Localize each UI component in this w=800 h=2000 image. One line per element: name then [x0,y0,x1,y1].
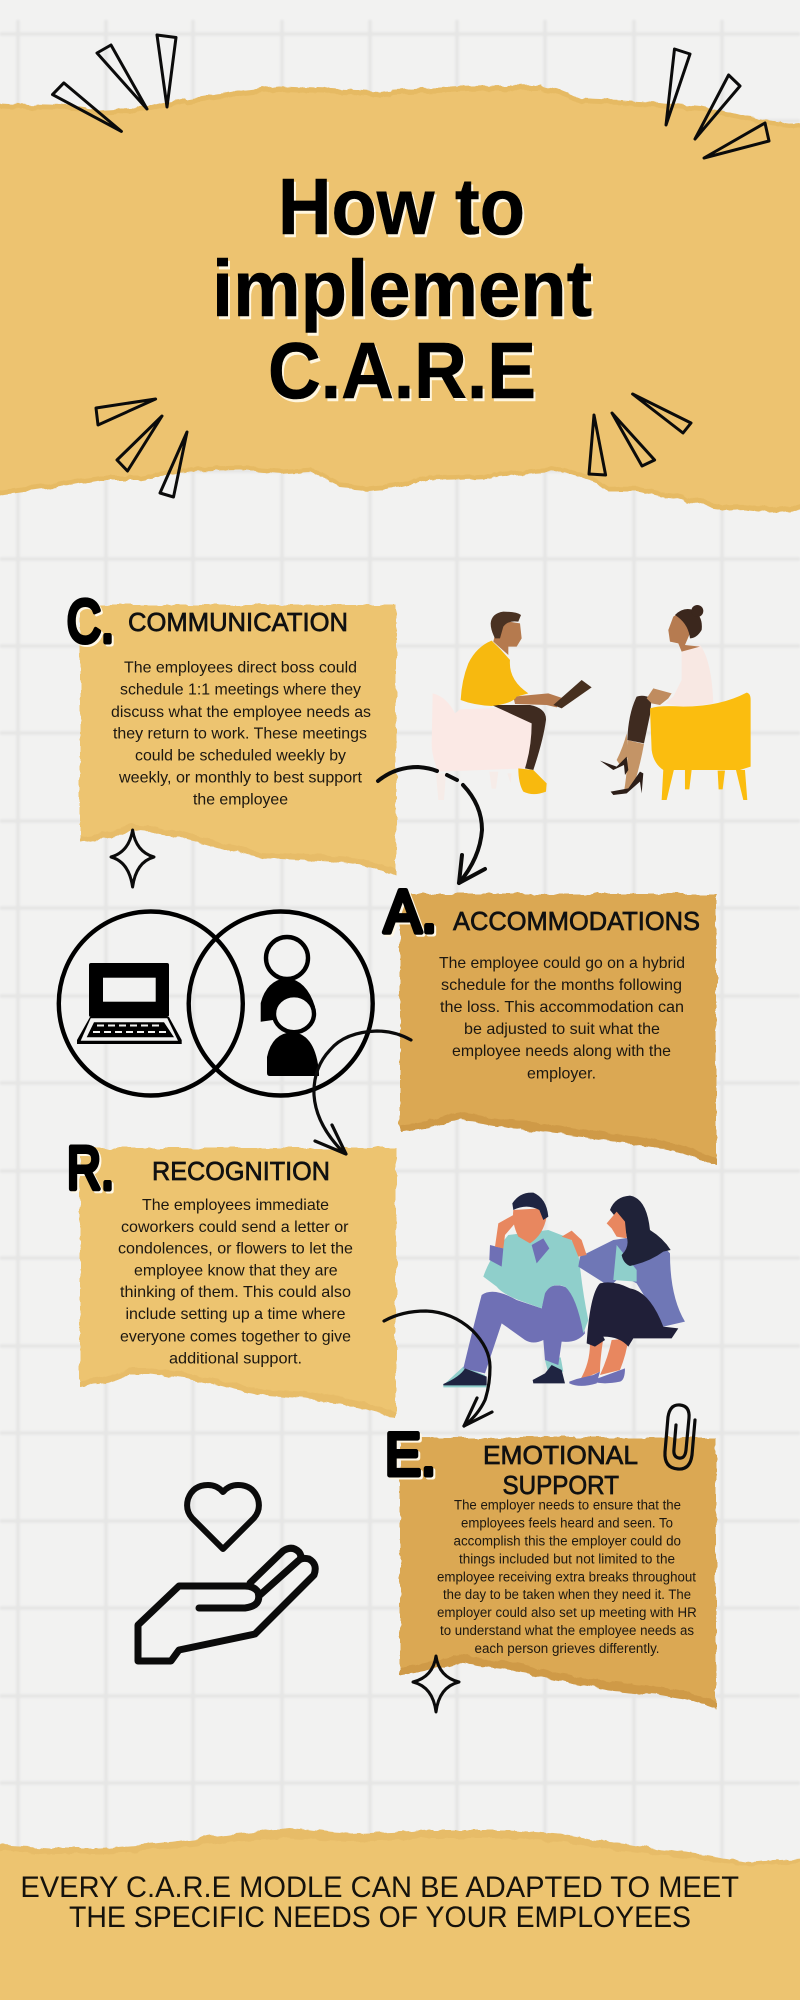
body text: emotional support: employees feels heard and seen. To [461,1515,673,1530]
body text: communication: the employee [193,792,288,809]
body text: emotional support: each person grieves differently. [474,1641,660,1656]
body text: accommodations: be adjusted to suit what the [464,1021,660,1038]
body text: recognition: The employees immediate [142,1197,329,1214]
heading: accommodations: ACCOMMODATIONS [453,906,700,936]
body text: emotional support: The employer needs to ensure that the [454,1498,681,1512]
footer banner: torn paper [0,1828,800,2000]
icon: sparkle under communication panel [111,830,154,887]
letter A: A. [384,878,437,945]
panel: recognition [80,1148,396,1419]
body text: communication [111,660,371,809]
footer text [20,1871,739,1934]
body text: recognition: employee know that they are [134,1262,338,1280]
heading: emotional support: SUPPORT [502,1470,619,1500]
icon: venn of laptop and people [59,912,373,1096]
title banner: torn paper [0,85,800,513]
body text: recognition: condolences, or flowers to let the [118,1241,353,1258]
panel: communication [80,605,396,876]
body text: recognition: thinking of them. This could also [120,1284,351,1301]
heading: emotional support [483,1440,638,1500]
body text: communication: schedule 1:1 meetings where they [120,682,361,699]
letter C: C. [67,588,114,655]
body text: accommodations: employee needs along with the [452,1043,671,1060]
body text: emotional support: the day to be taken when they need it. The [443,1587,691,1602]
icon: sparkle on emotional panel [413,1656,459,1712]
panel: emotional support [400,1438,716,1709]
body text: recognition: everyone comes together to give [120,1329,351,1346]
heading: emotional support: EMOTIONAL [483,1440,638,1470]
body text: emotional support: employee receiving extra breaks throughout [437,1569,696,1584]
heading: communication: COMMUNICATION [128,607,348,637]
body text: emotional support: things included but not limited to the [459,1551,675,1566]
icon: laptop [77,963,182,1044]
title: C.A.R.E [268,326,536,415]
illustration: meeting between employee and boss [432,605,751,800]
body text: accommodations: The employee could go on a hybrid [439,955,685,972]
body text: emotional support: to understand what the employee needs as [440,1623,694,1638]
icon: top-right burst marks [666,49,769,158]
title: How to [278,162,525,251]
footer text: EVERY C.A.R.E MODLE CAN BE ADAPTED TO MEET [20,1871,739,1904]
letter R: R. [67,1135,114,1202]
icon: bottom-left burst marks [96,399,187,497]
illustration: coworker comforting grieving employee [443,1193,685,1387]
arrow: accommodations to recognition [314,1031,411,1154]
icon: paperclip [665,1405,695,1469]
icon: people [261,937,319,1076]
body text: accommodations: employer. [527,1066,596,1083]
arrow: communication to accommodations [378,767,485,883]
icon: top-left burst marks [52,35,176,131]
heading: recognition: RECOGNITION [152,1156,330,1186]
body text: emotional support [437,1498,697,1656]
body text: recognition [118,1197,353,1368]
body text: communication: could be scheduled weekly by [135,748,346,765]
body text: communication: The employees direct boss could [124,660,357,676]
panel: accommodations [400,894,716,1166]
icon: bottom-right burst marks [589,394,691,475]
body text: recognition: coworkers could send a letter or [121,1219,349,1236]
body text: recognition: additional support. [169,1350,302,1368]
footer text: THE SPECIFIC NEEDS OF YOUR EMPLOYEES [69,1901,691,1934]
title [212,162,592,415]
body text: recognition: include setting up a time where [126,1306,346,1323]
body text: communication: they return to work. These meetings [113,726,367,743]
body text: emotional support: employer could also set up meeting with HR [437,1605,697,1620]
icon: open hand [138,1548,315,1661]
body text: communication: weekly, or monthly to best support [118,770,363,786]
body text: communication: discuss what the employee needs as [111,704,371,721]
letter E: E. [385,1421,436,1488]
title: implement [212,244,592,333]
body text: accommodations: schedule for the months following [441,977,682,994]
icon: heart [187,1485,259,1549]
body text: emotional support: accomplish this the employer could do [454,1533,681,1548]
body text: accommodations [439,955,685,1083]
body text: accommodations: the loss. This accommodation can [440,999,684,1016]
arrow: recognition to emotional support [384,1311,492,1426]
